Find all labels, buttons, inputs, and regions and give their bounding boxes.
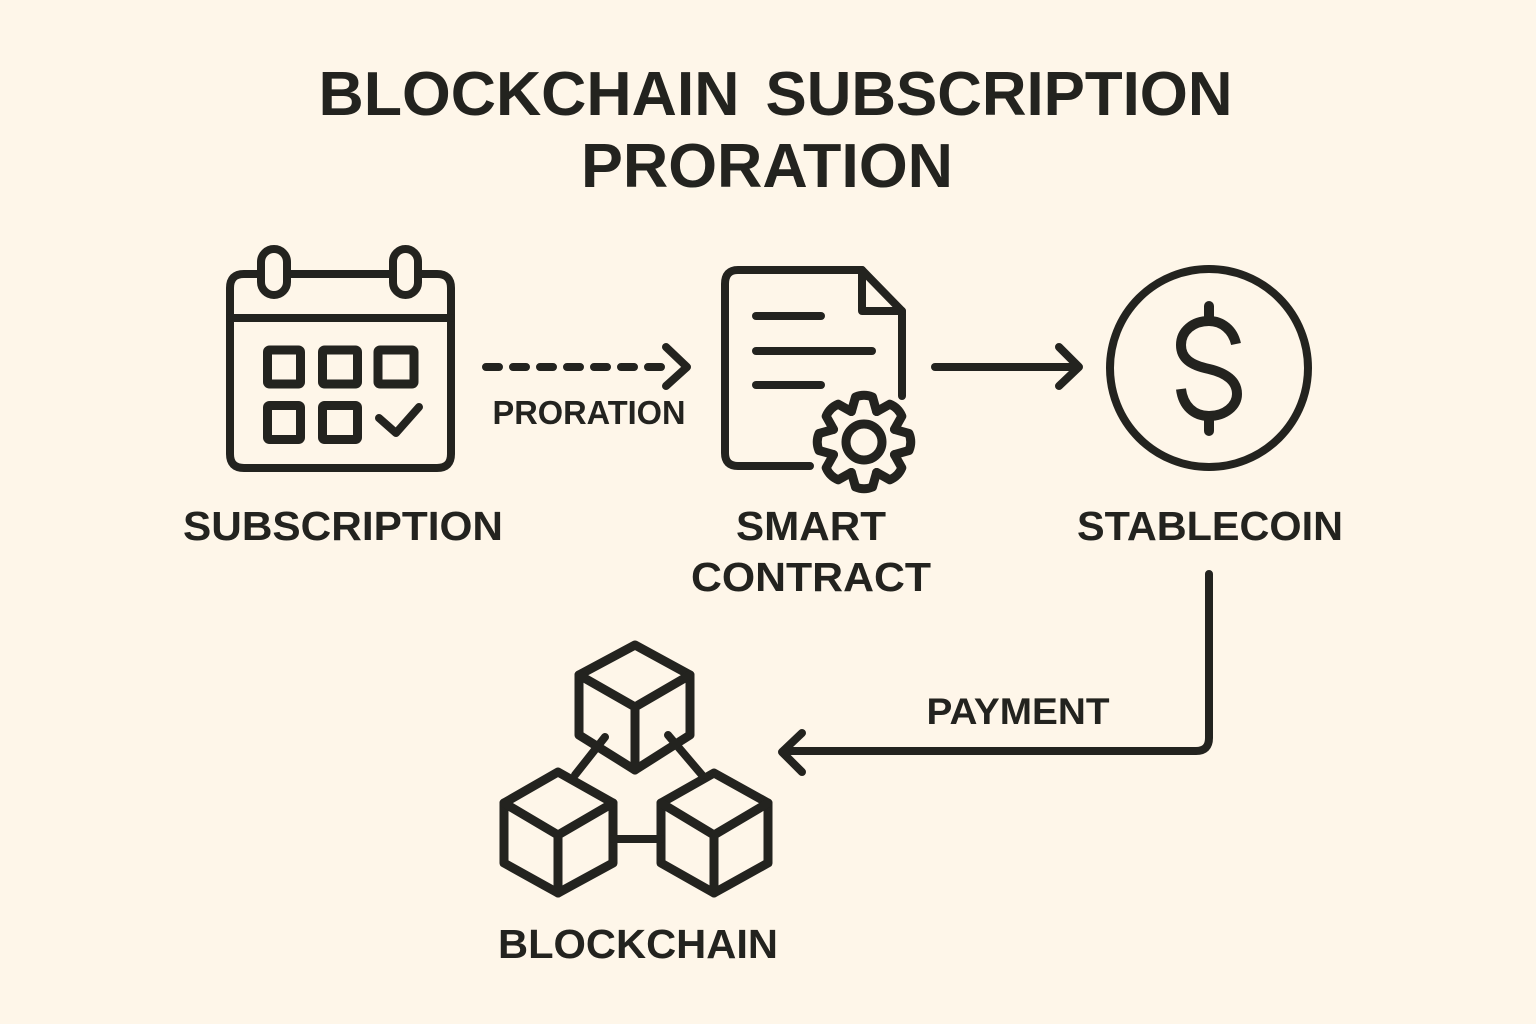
title: SUBSCRIPTION — [766, 60, 1232, 129]
icon: stablecoin — [1110, 269, 1308, 467]
title: PRORATION — [581, 132, 953, 201]
icon: blockchain cubes — [504, 645, 768, 893]
label: proration: PRORATION — [492, 394, 686, 431]
icon: gear — [817, 395, 911, 489]
icon: subscription calendar — [230, 249, 451, 468]
icon: smart contract document — [725, 270, 911, 489]
arrow: stablecoin to blockchain — [782, 574, 1209, 772]
label: subscription: SUBSCRIPTION — [183, 503, 503, 549]
label: blockchain: BLOCKCHAIN — [498, 921, 778, 967]
label: smart contract — [691, 503, 931, 600]
label: stablecoin: STABLECOIN — [1077, 503, 1343, 549]
title — [318, 60, 1232, 201]
label: payment: PAYMENT — [926, 691, 1110, 732]
label: smart contract: CONTRACT — [691, 554, 931, 600]
title: BLOCKCHAIN — [318, 60, 740, 129]
arrow: contract to stablecoin — [935, 347, 1079, 386]
arrow: proration dashed — [486, 347, 687, 386]
label: smart contract: SMART — [736, 503, 886, 549]
